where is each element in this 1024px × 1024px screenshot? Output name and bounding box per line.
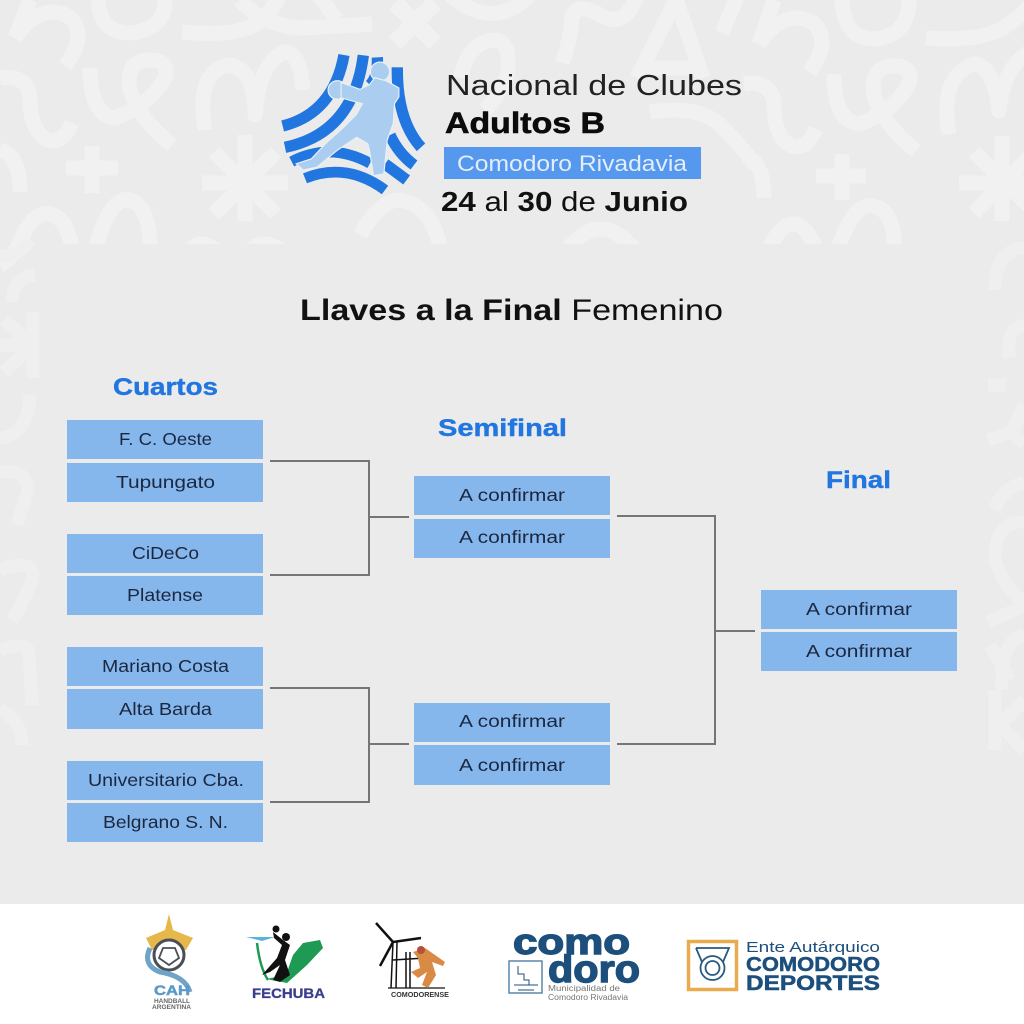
panel: semifinal teams: A confirmar xyxy=(459,711,565,731)
logo: Comodoro municipality xyxy=(509,921,640,1002)
heading: Cuartos: Cuartos xyxy=(113,374,218,401)
logo: Ente Autárquico Comodoro Deportes xyxy=(688,939,880,995)
logo: Comodoro municipality: como xyxy=(513,921,630,962)
logo: Asociación Comodorense: COMODORENSE xyxy=(391,992,449,999)
logo: FECHUBA xyxy=(246,926,325,1001)
header: city badge: Comodoro Rivadavia xyxy=(457,151,688,176)
logo: Ente Autárquico Comodoro Deportes: COMODORO xyxy=(746,954,880,976)
panel: final teams: A confirmar xyxy=(806,641,912,661)
logo: Ente Autárquico Comodoro Deportes: Ente Autárquico xyxy=(746,939,880,956)
heading: Semifinal: Semifinal xyxy=(438,415,567,442)
logo: CAH Handball Argentina: ARGENTINA xyxy=(152,1004,191,1011)
panel: quarterfinal teams: Tupungato xyxy=(116,472,215,492)
logo: FECHUBA: FECHUBA xyxy=(252,985,325,1001)
logo: CAH Handball Argentina: CAH xyxy=(154,982,190,998)
panel: quarterfinal teams: Alta Barda xyxy=(119,699,212,719)
panel: quarterfinal teams: Mariano Costa xyxy=(102,656,229,676)
header: event title: Nacional de Clubes xyxy=(446,70,742,102)
panel: quarterfinal teams xyxy=(67,420,263,842)
logo: Comodoro municipality: Municipalidad de xyxy=(548,984,621,993)
panel: semifinal teams: A confirmar xyxy=(459,527,565,547)
logo: Ente Autárquico Comodoro Deportes: DEPORTES xyxy=(746,972,880,995)
logo: Comodoro municipality: doro xyxy=(548,949,640,991)
panel: quarterfinal teams: Universitario Cba. xyxy=(88,770,244,790)
heading: Final: Final xyxy=(826,467,891,494)
bracket connector lines xyxy=(270,461,755,802)
logo: CAH Handball Argentina xyxy=(146,914,193,1011)
logo: Asociación Comodorense xyxy=(376,923,449,999)
header: dates: 24 al 30 de Junio xyxy=(441,186,688,217)
panel: semifinal teams: A confirmar xyxy=(459,755,565,775)
panel: quarterfinal teams: CiDeCo xyxy=(132,543,199,563)
panel: quarterfinal teams: Platense xyxy=(127,585,203,605)
heading: bracket title: Llaves a la Final Femenino xyxy=(300,294,723,327)
panel: semifinal teams: A confirmar xyxy=(459,485,565,505)
panel: semifinal teams xyxy=(414,476,610,785)
header: category: Adultos B xyxy=(445,107,605,140)
logo: CAH Handball Argentina: HANDBALL xyxy=(154,998,190,1005)
panel: quarterfinal teams: Belgrano S. N. xyxy=(103,812,228,832)
logo: Comodoro municipality: Comodoro Rivadavia xyxy=(548,993,629,1002)
footer band xyxy=(0,904,1024,1024)
panel: final teams xyxy=(761,590,957,671)
panel: central background xyxy=(35,244,988,904)
panel: final teams: A confirmar xyxy=(806,599,912,619)
icon: tournament logo xyxy=(283,55,421,190)
panel: quarterfinal teams: F. C. Oeste xyxy=(119,429,212,449)
header: city badge xyxy=(444,147,701,179)
